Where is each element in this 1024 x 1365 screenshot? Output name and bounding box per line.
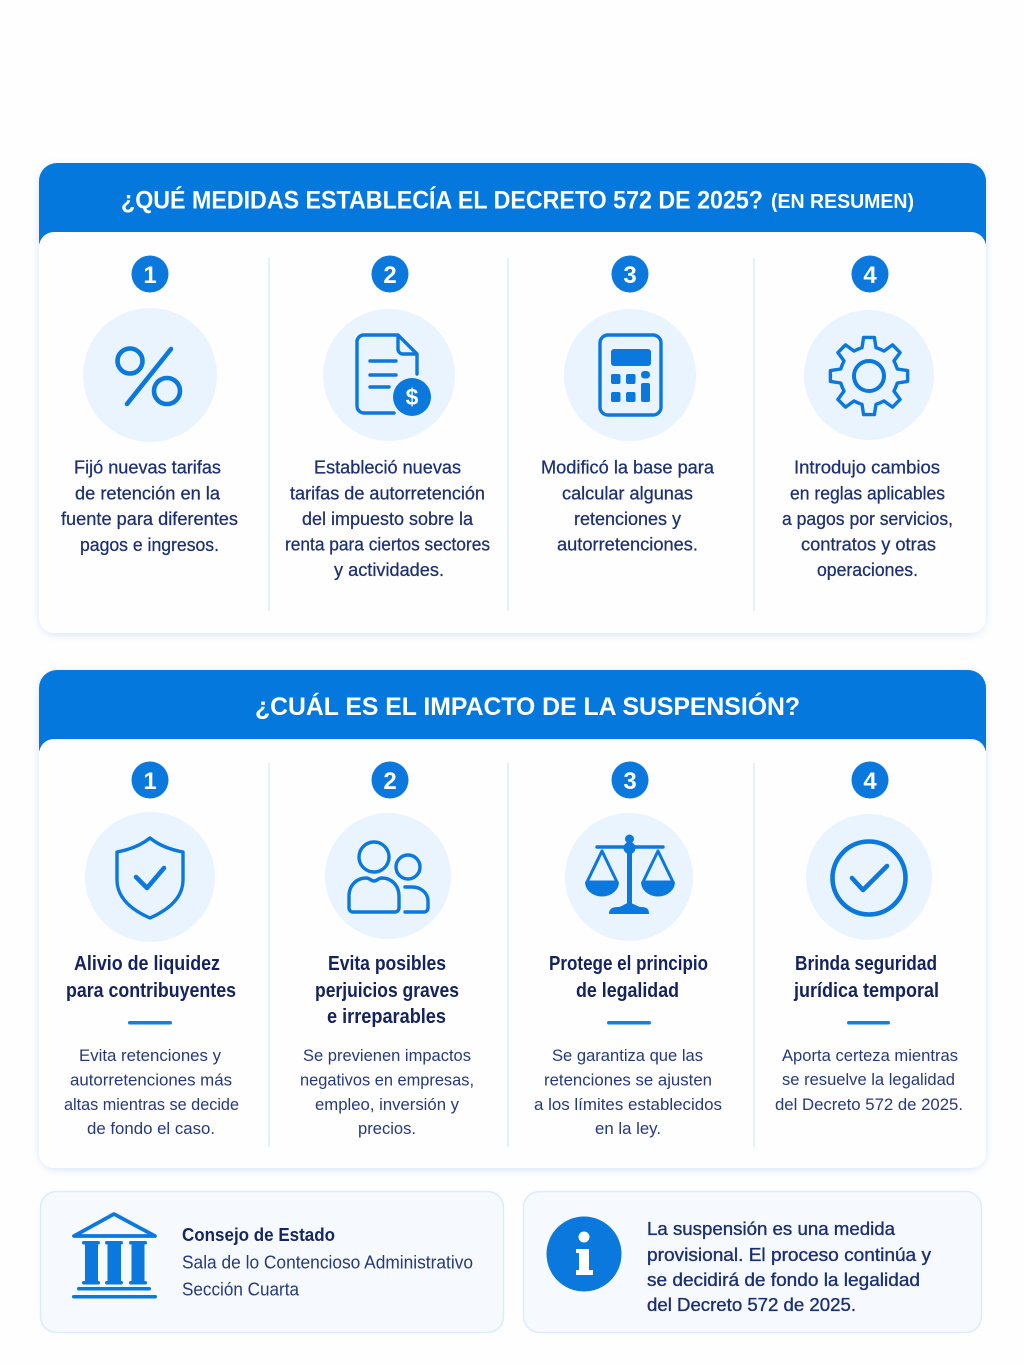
icon: gear [804,310,934,440]
text: protege legalidad: de legalidad [576,980,679,1002]
text: nota: se decidirá de fondo la legalidad [647,1270,920,1290]
badge: 3 [612,256,648,292]
badge: 3 [612,762,648,798]
text: alivio de liquidez: de fondo el caso. [87,1119,215,1138]
icon: info [546,1216,622,1292]
text: evita perjuicios: Se previenen impactos [303,1046,471,1065]
text: seguridad jurídica [775,953,963,1114]
text: medida 1 [61,458,238,555]
text: medida 2: Estableció nuevas [314,458,461,478]
badge: 4: 4 [863,768,877,795]
badge: 2: 2 [383,768,397,795]
text: alivio de liquidez: Evita retenciones y [79,1046,221,1065]
text: medida 4: en reglas aplicables [790,484,945,504]
badge: 1 [132,256,168,292]
header band: medidas [39,163,986,244]
icon: document with dollar: $ [406,384,419,410]
icon: calculator [564,309,696,441]
panel: medidas del decreto [39,163,986,633]
heading: medidas: ¿QUÉ MEDIDAS ESTABLECÍA EL DECRETO 572 DE 2025? [121,186,763,214]
text: medida 3 [541,458,715,554]
text: institución [182,1225,473,1300]
badge: 2 [372,256,408,292]
text: evita perjuicios: Evita posibles [328,953,446,975]
text: evita perjuicios [300,953,474,1138]
text: alivio de liquidez: altas mientras se decide [64,1095,239,1114]
text: nota: del Decreto 572 de 2025. [647,1295,856,1315]
text: medida 2: y actividades. [334,560,444,580]
text: nota [647,1219,931,1315]
icon: shield with check [85,812,215,942]
text: medida 3: autorretenciones. [557,534,698,554]
text: evita perjuicios: e irreparables [327,1006,446,1028]
icon: check circle [806,814,932,940]
badge: 3: 3 [623,768,637,795]
icon: courthouse [72,1214,157,1298]
text: alivio de liquidez: Alivio de liquidez [74,953,220,975]
heading: medidas: (EN RESUMEN) [771,191,914,213]
text: medida 1: de retención en la [75,484,221,504]
text: evita perjuicios: perjuicios graves [315,980,459,1002]
text: seguridad jurídica: se resuelve la legalidad [782,1070,955,1089]
badge: 1 [132,762,168,798]
icon: scales [565,813,693,941]
badge: 2 [372,762,408,798]
text: evita perjuicios: negativos en empresas, [300,1070,474,1090]
text: institución: Sala de lo Contencioso Administrativo [182,1252,473,1272]
text: medida 4 [782,458,953,580]
text: medida 4: contratos y otras [801,534,936,554]
text: medida 3: retenciones y [574,509,681,529]
text: seguridad jurídica: Brinda seguridad [795,953,937,975]
text: evita perjuicios: precios. [358,1119,416,1138]
panel: impacto de la suspensión [39,670,986,1168]
text: nota: provisional. El proceso continúa y [647,1245,931,1265]
text: medida 2: tarifas de autorretención [290,484,485,504]
text: seguridad jurídica: jurídica temporal [793,980,939,1002]
text: medida 2: renta para ciertos sectores [285,534,490,554]
text: protege legalidad: Se garantiza que las [552,1046,703,1065]
badge: 3: 3 [623,262,637,289]
badge: 4: 4 [863,262,877,289]
icon: document with dollar [323,309,455,441]
icon: people [325,813,451,939]
header band: impacto [39,670,986,751]
text: nota: La suspensión es una medida [647,1219,896,1239]
badge: 4 [852,762,888,798]
panel: consejo de estado [40,1192,504,1332]
text: medida 3: Modificó la base para [541,458,715,478]
text: medida 1: pagos e ingresos. [80,535,219,555]
heading: impacto: ¿CUÁL ES EL IMPACTO DE LA SUSPENSIÓN? [255,691,800,721]
text: protege legalidad [534,953,722,1138]
text: medida 4: a pagos por servicios, [782,509,953,529]
text: alivio de liquidez: autorretenciones más [70,1070,232,1090]
text: protege legalidad: a los límites establecidos [534,1095,722,1114]
text: evita perjuicios: empleo, inversión y [315,1095,459,1114]
text: protege legalidad: Protege el principio [549,953,708,975]
text: seguridad jurídica: del Decreto 572 de 2025. [775,1095,963,1114]
text: medida 3: calcular algunas [562,484,693,504]
text: medida 2: del impuesto sobre la [302,509,474,529]
badge: 1: 1 [143,768,157,795]
text: medida 1: Fijó nuevas tarifas [74,458,221,478]
text: medida 4: Introdujo cambios [794,458,940,478]
badge: 2: 2 [383,262,397,289]
panel: nota informativa [524,1192,982,1332]
text: alivio de liquidez: para contribuyentes [66,980,236,1002]
badge: 4 [852,256,888,292]
text: medida 1: fuente para diferentes [61,509,238,529]
text: alivio de liquidez [64,953,239,1138]
text: protege legalidad: en la ley. [595,1119,661,1138]
text: medida 2 [285,458,490,580]
text: medida 4: operaciones. [817,560,918,580]
text: institución: Consejo de Estado [182,1225,335,1245]
text: protege legalidad: retenciones se ajusten [544,1070,712,1090]
body: medidas [39,232,986,633]
text: institución: Sección Cuarta [182,1280,300,1300]
text: seguridad jurídica: Aporta certeza mientras [782,1046,958,1065]
body: impacto [39,739,986,1168]
badge: 1: 1 [143,262,157,289]
icon: percent [83,308,217,442]
